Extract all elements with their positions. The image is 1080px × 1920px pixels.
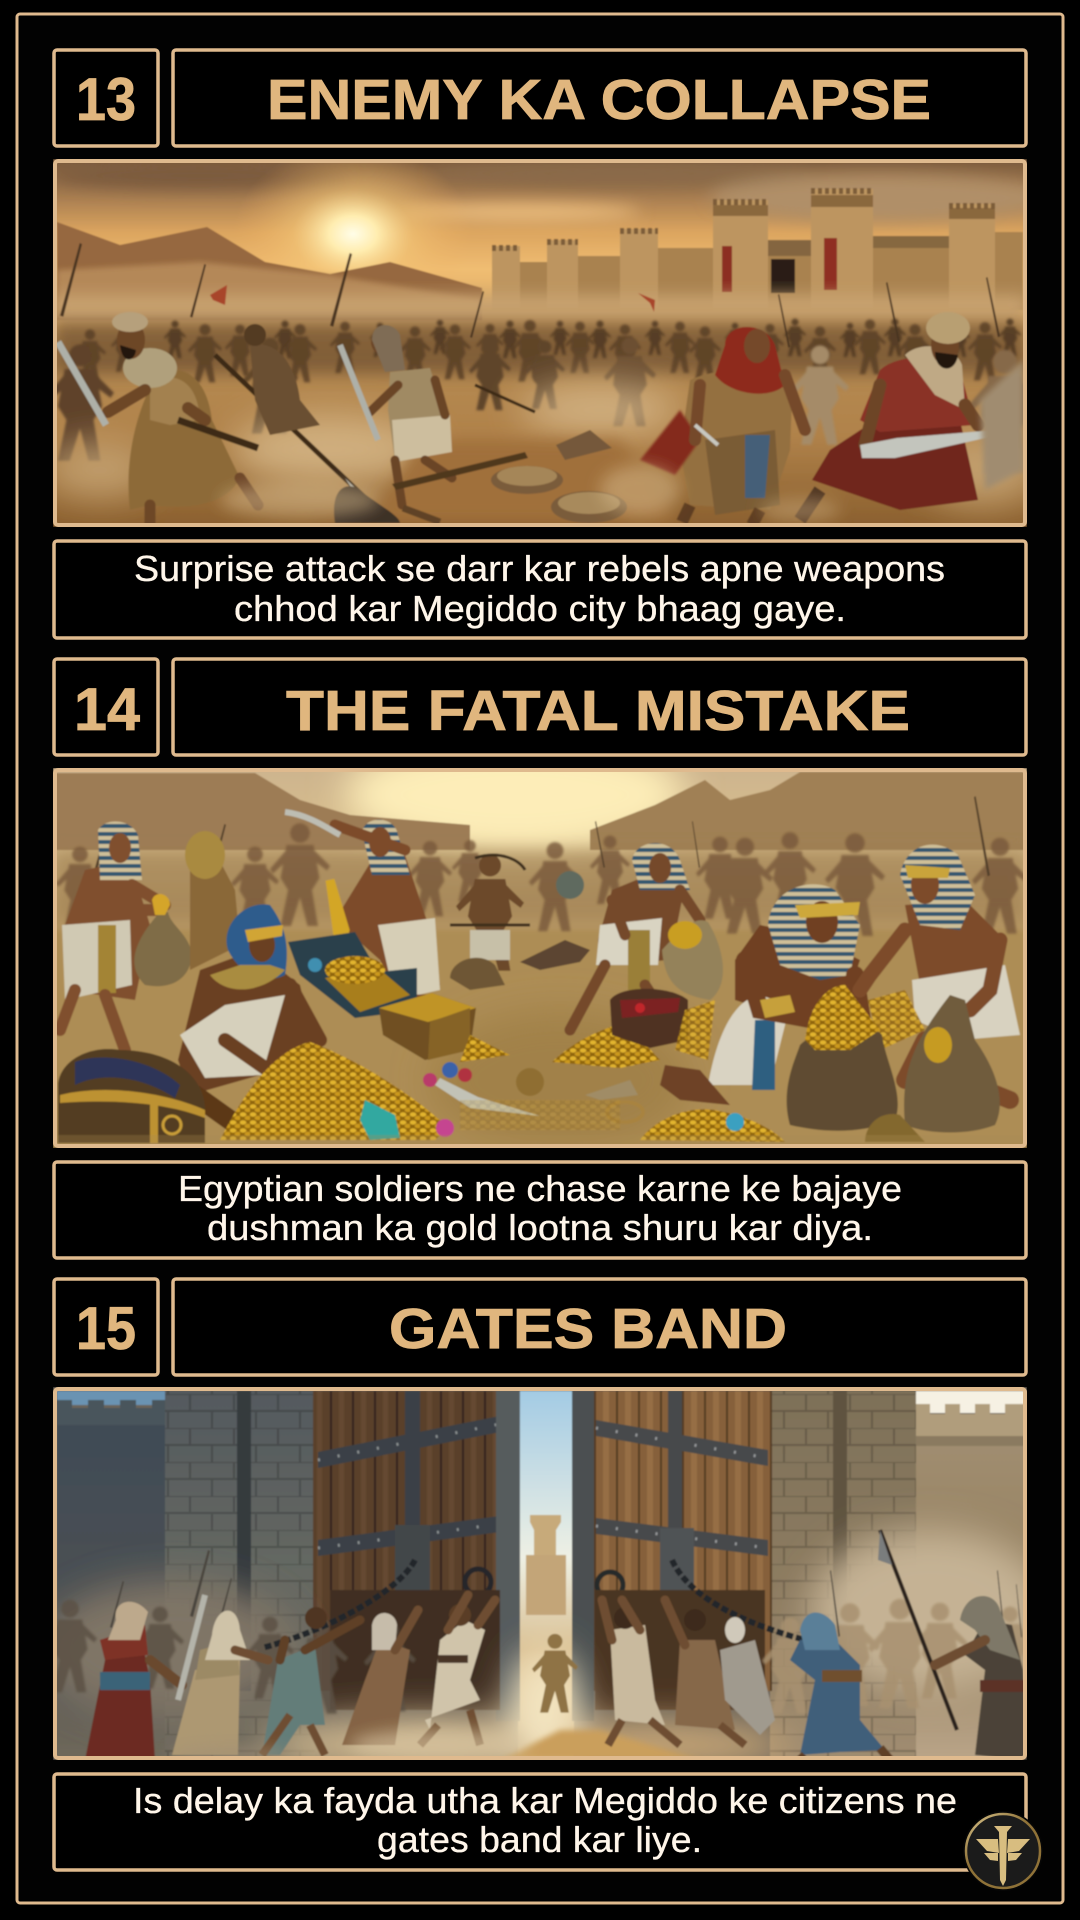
image frame — [55, 161, 1025, 525]
caption 15: gates band kar liye. — [377, 1819, 702, 1860]
right soldier — [860, 845, 1020, 1100]
caption 14: dushman ka gold lootna shuru kar diya. — [207, 1207, 873, 1248]
runner with red robe — [800, 312, 1023, 520]
caption 14: Egyptian soldiers ne chase karne ke bajaye — [178, 1168, 902, 1209]
sandy ground — [370, 440, 680, 523]
desert mountains — [53, 773, 470, 850]
section 14 — [53, 659, 1028, 1258]
large gold pile — [220, 1042, 448, 1140]
citizen in red robe — [85, 1595, 205, 1760]
runner middle — [340, 325, 452, 505]
citizen in white tunic pushing left door — [420, 1595, 495, 1745]
number badge 13 — [54, 50, 158, 146]
citizen in white tunic pushing right door — [602, 1600, 680, 1745]
mountains — [57, 222, 482, 320]
citizen in brown tunic — [342, 1610, 418, 1745]
sword emblem — [976, 1826, 1030, 1886]
second figure behind — [185, 831, 240, 970]
caption 14 — [54, 1162, 1026, 1258]
caption 15 — [54, 1774, 1026, 1870]
number badge 13: 13 — [76, 66, 136, 133]
citizen in teal tunic — [262, 1607, 360, 1755]
illustration: Egyptian soldiers looting gold — [53, 768, 1027, 1148]
left stone tower — [165, 1391, 315, 1760]
caption 13: chhod kar Megiddo city bhaag gaye. — [234, 588, 846, 629]
citizen in grey tunic — [720, 1617, 775, 1735]
caption 13: Surprise attack se darr kar rebels apne weapons — [134, 548, 945, 589]
heading: the fatal mistake: THE FATAL MISTAKE — [286, 679, 910, 743]
dust left, centre and right — [40, 1530, 1050, 1775]
foreground dust — [170, 1729, 530, 1763]
number badge 15 — [54, 1279, 158, 1375]
two sacks of gold — [787, 985, 1000, 1132]
number badge 14: 14 — [74, 676, 141, 743]
heading: enemy ka collapse: ENEMY KA COLLAPSE — [267, 68, 931, 132]
gap between the doors with distant city — [518, 1391, 574, 1760]
fortress — [492, 189, 1023, 310]
right door — [572, 1391, 772, 1721]
dust clouds — [45, 384, 1040, 506]
heading: enemy ka collapse — [173, 50, 1026, 146]
runner behind — [244, 324, 320, 435]
gold by the sacks — [868, 990, 925, 1050]
foreground dust — [220, 465, 840, 522]
heading: gates band — [173, 1279, 1026, 1375]
citizen in blue robe — [790, 1612, 890, 1760]
illustration: rebels fleeing from a walled city at sunset — [53, 159, 1027, 527]
ground — [500, 1730, 700, 1760]
section 13 — [45, 50, 1050, 638]
image frame — [55, 1389, 1025, 1758]
sandy ground — [53, 930, 1027, 1148]
big soldier filling a sack — [660, 884, 862, 1105]
number badge 15: 15 — [76, 1295, 136, 1362]
open treasure chest — [288, 932, 417, 1018]
scattered gold coins — [460, 1100, 620, 1130]
distant soldier with bow — [450, 854, 584, 971]
golden box chest — [379, 993, 476, 1060]
spear thrown — [215, 355, 378, 510]
heading: the fatal mistake — [173, 659, 1026, 755]
blue headdress soldier kneeling — [178, 904, 320, 1120]
small figure in the gap — [532, 1634, 578, 1713]
chains — [262, 1560, 415, 1648]
soldier looting with sack, middle — [570, 843, 723, 1030]
section 15 — [40, 1279, 1050, 1870]
citizen in tan tunic — [665, 1600, 745, 1745]
spear carrier at right — [878, 1530, 1027, 1760]
right stone tower — [770, 1391, 916, 1760]
crowd in the dust — [53, 850, 1027, 920]
caption 15: Is delay ka fayda utha kar Megiddo ke citizens ne — [133, 1780, 957, 1821]
citizen in cream robe — [172, 1611, 268, 1755]
treasure chest bottom-left — [58, 1049, 205, 1143]
soldier with sack, left — [60, 822, 192, 1050]
logo: sword and wings emblem — [963, 1811, 1043, 1891]
image frame — [55, 770, 1025, 1146]
mid figures — [46, 337, 1041, 473]
distant dust and crowd — [53, 295, 1027, 323]
caption 13 — [54, 541, 1026, 638]
number badge 14 — [54, 659, 158, 755]
gold bottom — [640, 1109, 785, 1142]
runner left — [58, 312, 258, 525]
runner with red scarf — [640, 327, 805, 525]
left sky and battlements — [57, 1391, 172, 1760]
left door — [313, 1391, 520, 1721]
illustration: citizens closing the city gates — [53, 1387, 1027, 1760]
right sky and battlements — [912, 1391, 1027, 1760]
fallen body and sack mid field — [450, 940, 590, 990]
background crowd — [43, 1600, 416, 1714]
gems and dagger — [360, 1062, 643, 1140]
soldier raising sword — [285, 812, 445, 1030]
fallen shields and spears — [334, 430, 627, 523]
heading: gates band: GATES BAND — [389, 1297, 787, 1361]
red treasure chest and gold pile — [552, 1022, 660, 1068]
